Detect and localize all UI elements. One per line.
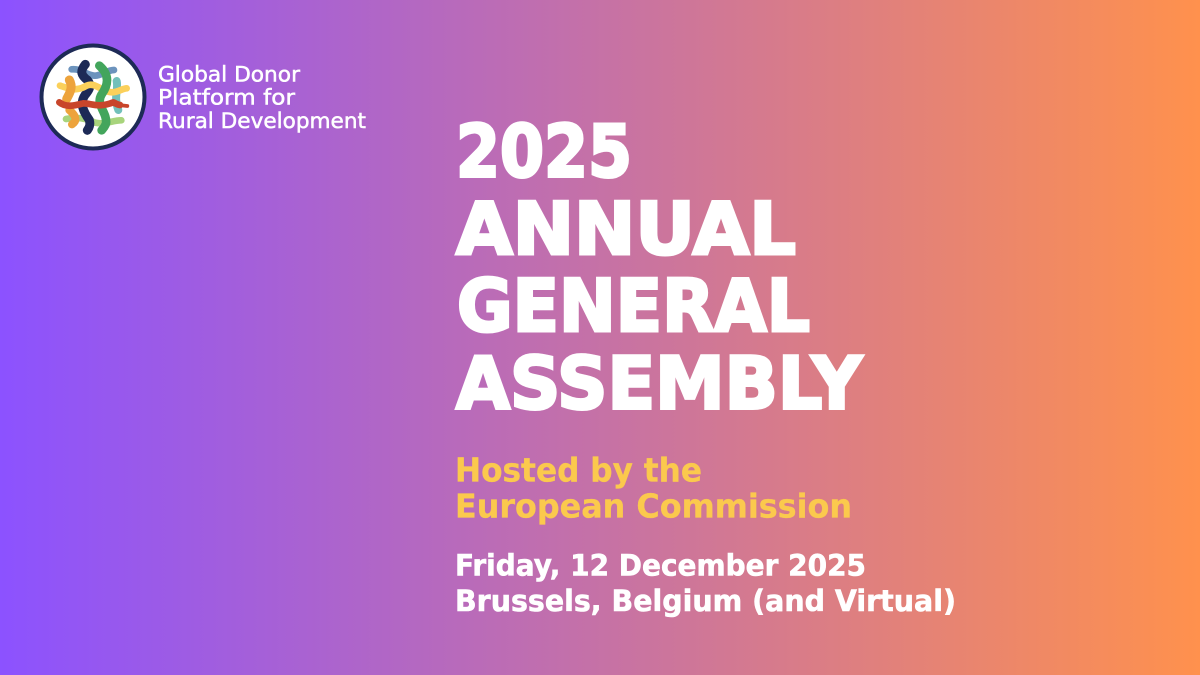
host line: Hosted by the bbox=[455, 450, 702, 490]
organisation name: Global Donor bbox=[158, 62, 300, 88]
title: GENERAL bbox=[457, 264, 810, 348]
title bbox=[456, 110, 863, 426]
icon: platform logo bbox=[42, 46, 144, 148]
title: ASSEMBLY bbox=[456, 342, 863, 426]
host line bbox=[455, 450, 852, 526]
date and location: Friday, 12 December 2025 bbox=[455, 548, 866, 582]
organisation name bbox=[158, 62, 366, 134]
title: ANNUAL bbox=[456, 187, 796, 271]
date and location bbox=[455, 548, 956, 618]
organisation name: Platform for bbox=[158, 86, 295, 110]
title: 2025 bbox=[456, 110, 632, 194]
host line: European Commission bbox=[455, 486, 852, 526]
organisation name: Rural Development bbox=[158, 109, 366, 134]
date and location: Brussels, Belgium (and Virtual) bbox=[455, 584, 956, 618]
